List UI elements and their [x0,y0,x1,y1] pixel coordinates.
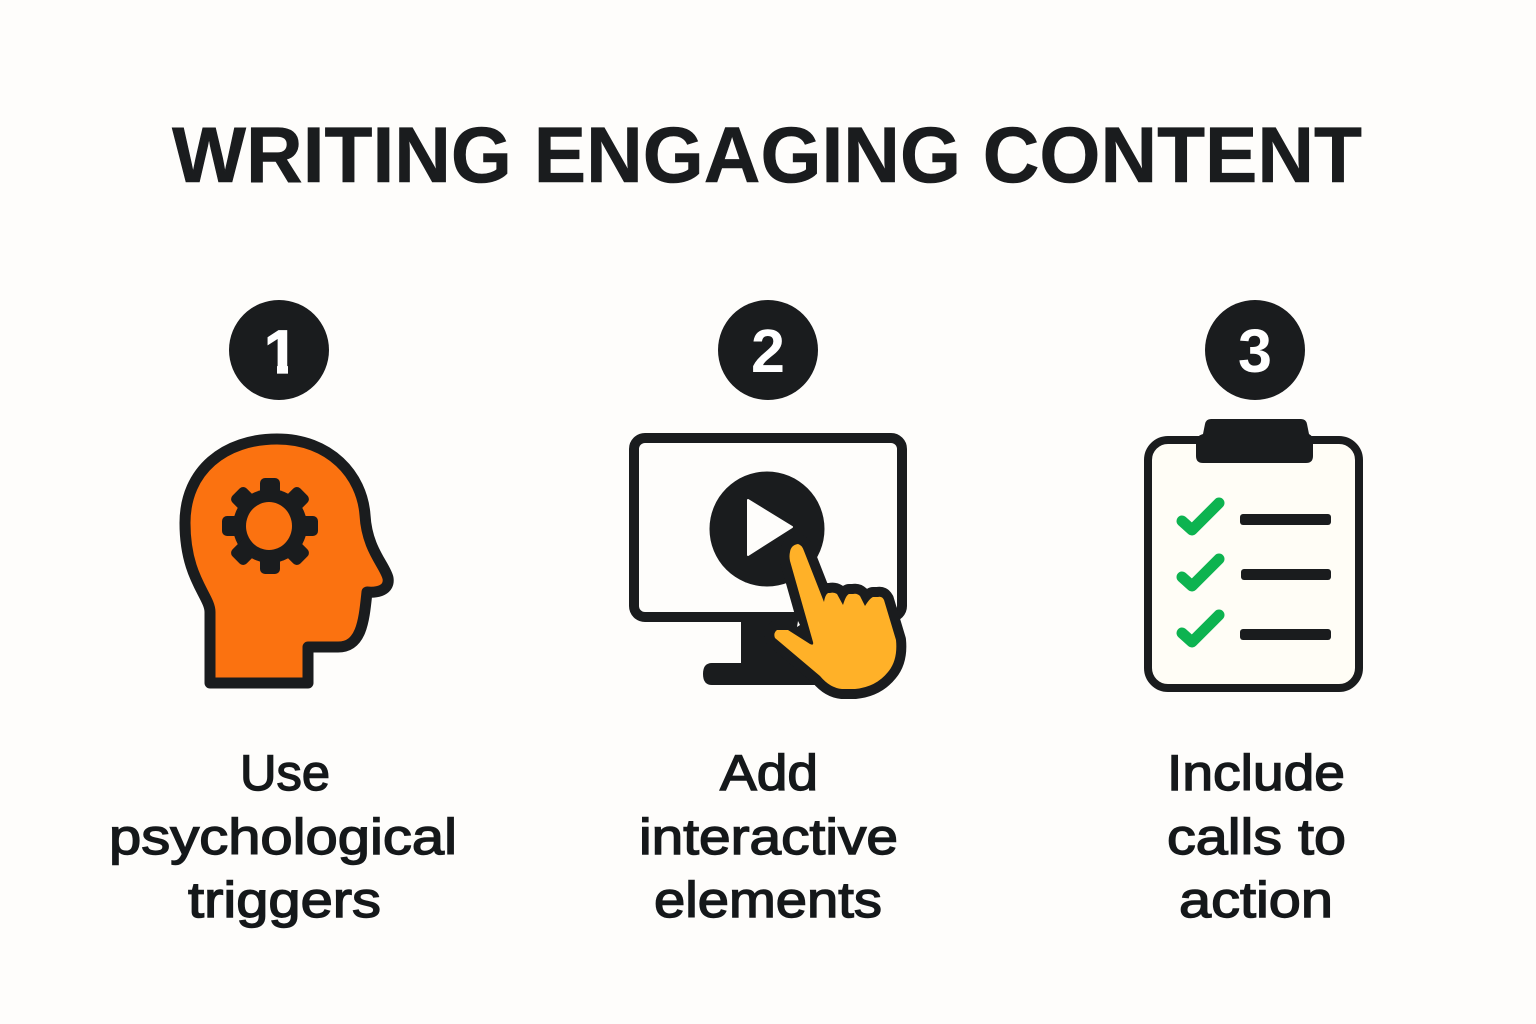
checklist lines [1240,514,1331,640]
icon: head with gear [185,439,388,683]
label: add interactive elements: interactive [639,809,898,865]
label: use psychological triggers: triggers [188,872,381,928]
label: add interactive elements: Add [720,745,818,801]
label: use psychological triggers: Use [240,745,330,801]
icon: pointing hand [774,544,896,689]
number badge 3 [1205,300,1305,400]
label: include calls to action: calls to [1167,809,1346,865]
number badge 3: 3 [1238,317,1272,385]
icon: gear [222,478,318,574]
label: include calls to action: Include [1167,745,1345,801]
number badge 2: 2 [751,317,785,385]
label: add interactive elements: elements [654,872,882,928]
number badge 1: 1 [264,318,298,386]
title: WRITING ENGAGING CONTENT [172,110,1362,199]
label: include calls to action: action [1179,872,1333,928]
label: use psychological triggers: psychological [109,809,457,865]
number badge 1 [229,300,329,400]
icon: green check marks [1182,503,1219,642]
icon: monitor with play button and hand [634,438,902,689]
panel: step 1 psychological triggers [109,300,457,928]
icon: play button [710,472,824,586]
label: add interactive elements [639,745,898,928]
number badge 2 [718,300,818,400]
label: include calls to action [1167,745,1346,928]
label: use psychological triggers [109,745,457,928]
panel: step 3 calls to action [1148,300,1359,928]
panel: step 2 interactive elements [634,300,902,928]
icon: clipboard checklist [1148,419,1359,688]
